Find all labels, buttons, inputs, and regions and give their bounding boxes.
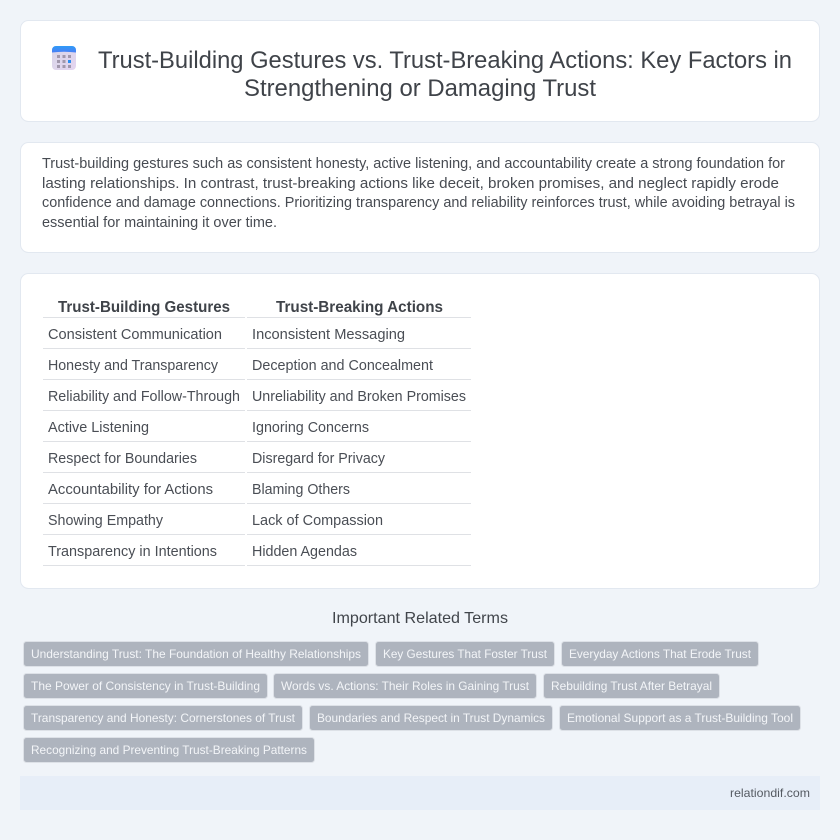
table grid [43, 318, 471, 566]
column: trust-building gestures: Consistent Communication [48, 327, 222, 343]
column: trust-breaking actions: Blaming Others [252, 482, 350, 498]
related terms chips: Recognizing and Preventing Trust-Breaking Patterns [31, 743, 307, 757]
column: trust-building gestures: Honesty and Transparency [48, 358, 219, 374]
text block: introduction [42, 156, 795, 231]
column: trust-breaking actions: Trust-Breaking Actions [276, 299, 443, 316]
column: trust-building gestures: Respect for Boundaries [48, 451, 197, 467]
heading: important related terms: Important Related Terms [332, 610, 508, 627]
column: trust-breaking actions: Inconsistent Messaging [252, 327, 405, 343]
column: trust-building gestures: Transparency in Intentions [48, 544, 217, 560]
title: Strengthening or Damaging Trust [244, 75, 596, 102]
related terms chips: Understanding Trust: The Foundation of Healthy Relationships [31, 647, 361, 661]
title: Trust-Building Gestures vs. Trust-Breaking Actions: Key Factors in [98, 47, 792, 74]
related terms chips: The Power of Consistency in Trust-Building [31, 679, 260, 693]
related terms chips: Boundaries and Respect in Trust Dynamics [317, 711, 545, 725]
text block: introduction: Trust-building gestures such as consistent honesty, active listening, and accountability create a strong foundation for [42, 156, 785, 172]
column: trust-building gestures: Showing Empathy [48, 513, 164, 529]
text block: introduction: confidence and damage connections. Prioritizing transparency and reliability reinforces trust, while avoiding betrayal is [42, 195, 795, 211]
column: trust-breaking actions: Hidden Agendas [252, 544, 357, 560]
related terms chips [24, 642, 800, 762]
footer [20, 776, 820, 810]
column: trust-breaking actions: Lack of Compassion [252, 513, 383, 529]
related terms chips: Emotional Support as a Trust-Building Tool [567, 711, 793, 725]
column: trust-building gestures: Accountability for Actions [48, 482, 213, 498]
column: trust-breaking actions: Unreliability and Broken Promises [252, 389, 466, 405]
column: trust-building gestures [48, 299, 240, 560]
text block: introduction: lasting relationships. In contrast, trust-breaking actions like deceit, broken promises, and neglect rapidly erode [42, 176, 779, 192]
related terms chips: Transparency and Honesty: Cornerstones of Trust [31, 711, 296, 725]
related terms chips: Key Gestures That Foster Trust [383, 647, 548, 661]
column: trust-breaking actions: Deception and Concealment [252, 358, 433, 374]
footer: relationdif.com [730, 786, 810, 800]
column: trust-building gestures: Active Listening [48, 420, 149, 436]
text block: introduction: essential for maintaining it over time. [42, 215, 277, 231]
title [98, 47, 792, 102]
related terms chips: Everyday Actions That Erode Trust [569, 647, 752, 661]
panel: comparison table [20, 274, 820, 588]
column: trust-breaking actions: Disregard for Privacy [252, 451, 386, 467]
icon: calendar [52, 46, 76, 70]
panel: header [20, 20, 820, 122]
panel: introduction [20, 142, 820, 252]
column: trust-building gestures: Trust-Building Gestures [58, 299, 230, 316]
column: trust-breaking actions [252, 299, 466, 560]
column: trust-breaking actions: Ignoring Concerns [252, 420, 369, 436]
related terms chips: Rebuilding Trust After Betrayal [551, 679, 712, 693]
column: trust-building gestures: Reliability and Follow-Through [48, 389, 240, 405]
related terms chips: Words vs. Actions: Their Roles in Gaining Trust [281, 679, 530, 693]
